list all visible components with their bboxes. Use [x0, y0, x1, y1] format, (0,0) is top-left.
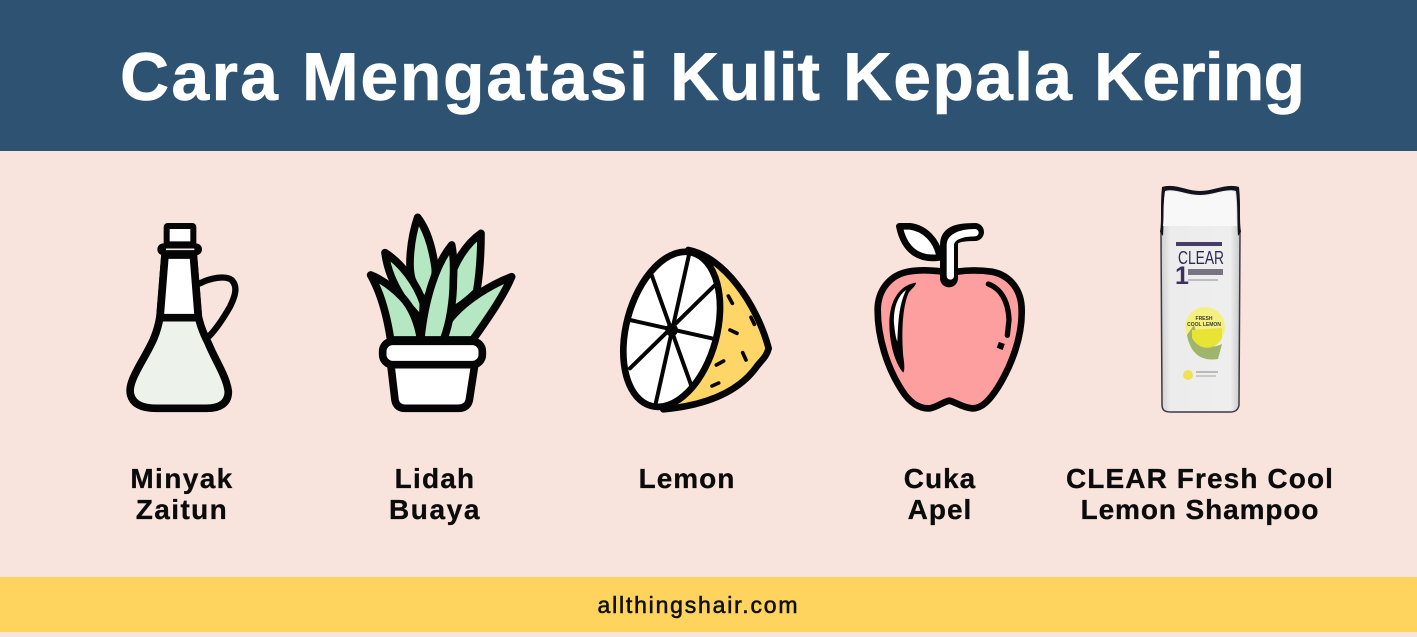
icon: aloe vera plant [371, 217, 512, 408]
label: Cuka Apel: Apel [908, 494, 972, 525]
footer website: allthingshair.com [598, 592, 798, 618]
label: Lemon: Lemon [639, 463, 735, 494]
title: Mengatasi [302, 39, 648, 115]
title: Kering [1094, 39, 1305, 115]
title: Kulit [670, 39, 820, 115]
label: Lidah Buaya: Buaya [389, 494, 481, 525]
header band [0, 0, 1417, 151]
footer band [0, 577, 1417, 632]
label: CLEAR Fresh Cool Lemon Shampoo: CLEAR Fresh Cool [1066, 463, 1334, 494]
icon: CLEAR shampoo bottle [1160, 186, 1241, 412]
title: Kepala [843, 39, 1073, 115]
label: Lidah Buaya: Lidah [395, 463, 475, 494]
label: CLEAR Fresh Cool Lemon Shampoo: Lemon Shampoo [1081, 494, 1319, 525]
product variant text: FRESH [1196, 316, 1213, 322]
title: Cara [120, 39, 279, 115]
icon: CLEAR shampoo bottle: COOL LEMON [1187, 322, 1221, 328]
label: Cuka Apel: Cuka [904, 463, 976, 494]
product brand text: CLEAR [1178, 248, 1224, 268]
icon: olive oil bottle [130, 226, 235, 408]
icon: lemon half [607, 241, 769, 418]
icon: apple [878, 226, 1022, 408]
icon: CLEAR shampoo bottle: 1 [1175, 262, 1189, 290]
label: Minyak Zaitun: Minyak [130, 463, 234, 494]
label: Minyak Zaitun: Zaitun [136, 494, 228, 525]
